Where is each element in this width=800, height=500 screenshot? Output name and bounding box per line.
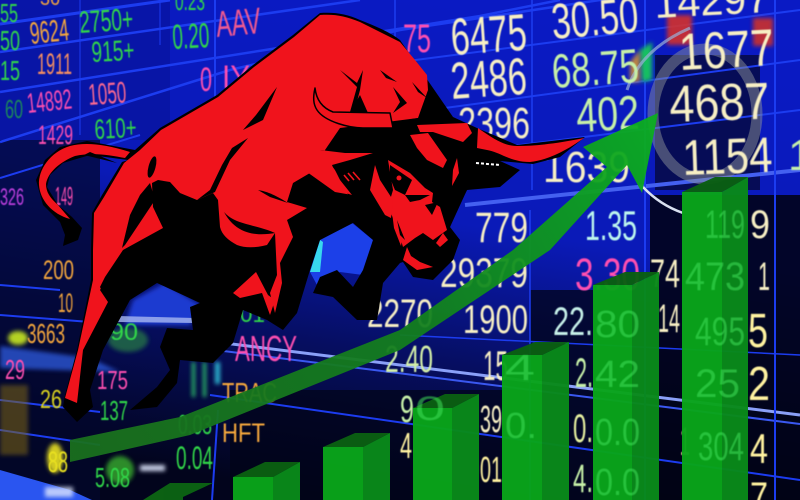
ticker digits: 2 (748, 358, 770, 411)
black neck behind head (325, 118, 478, 255)
faint digits on bars: 0 (415, 390, 445, 428)
ticker digits: 9624 (28, 12, 71, 51)
ticker digits: 1 (758, 255, 770, 299)
ticker digits: 2.40 (385, 339, 433, 381)
ticker digits: 2396 (458, 99, 530, 148)
ticker digits: HFT (222, 418, 265, 448)
faint digits on bars: 25 (695, 362, 740, 406)
faint digits on bars: 42 (595, 354, 640, 396)
faint digits on bars: 473 (685, 255, 745, 299)
ticker digits: 1050 (87, 76, 127, 112)
bar 3 (413, 394, 479, 500)
ticker digits: 1911 (37, 48, 72, 81)
ticker digits: 14892 (25, 83, 73, 119)
ticker digits: 2. (575, 349, 593, 396)
ticker digits: 1900 (463, 298, 528, 342)
tail (39, 144, 130, 219)
ticker digits: 4 (400, 425, 412, 466)
faint digits on bars: 0. (505, 405, 537, 446)
ticker digits: 68.75 (550, 40, 641, 99)
ticker digits: 39 (480, 399, 502, 441)
neck red stripe (312, 150, 373, 195)
hoof-side red shape (233, 272, 275, 315)
cheek (370, 165, 393, 218)
growth arrow (70, 113, 658, 462)
ticker digits: 1154 (681, 127, 773, 186)
ticker digits: 50 (0, 25, 20, 56)
bar 0 (143, 483, 213, 500)
faint digits on bars (415, 203, 745, 500)
bar 1 (233, 462, 300, 500)
ticker digits: 610+ (94, 112, 137, 145)
faint digits on bars: 495 (695, 310, 745, 354)
ticker digits: 5.08 (95, 462, 130, 493)
left horn (314, 88, 393, 128)
gap glow behind legs (125, 283, 200, 325)
ticker digits: ANCY (235, 328, 297, 369)
faint digits on bars: 4 (505, 347, 535, 388)
ticker digits: TRAC (222, 377, 277, 408)
ticker digits: 3663 (27, 318, 65, 349)
bar 6 (682, 177, 748, 500)
ticker digits: 137 (100, 395, 128, 426)
right horn (477, 128, 584, 162)
faint digits on bars: 119 (705, 203, 745, 247)
ticker digits: 402 (575, 87, 640, 143)
ticker digits: 1429 (38, 120, 73, 150)
ticker digits: 14 (658, 297, 680, 341)
jaw (392, 212, 402, 246)
ticker digits: 01 (480, 449, 502, 490)
ticker digits: 29 (5, 354, 25, 385)
head sliver (452, 158, 459, 186)
body shading (84, 70, 427, 302)
muzzle (403, 247, 433, 270)
bull face (388, 160, 447, 247)
ticker digits: 01 (240, 301, 265, 328)
ticker digits: 4. (573, 457, 593, 500)
horn-mouth drool highlight (476, 163, 500, 165)
ticker digits: 4 (750, 425, 768, 472)
ticker digits: 9 (400, 389, 414, 431)
ticker digits: 10 (58, 288, 73, 318)
eye and face lines (390, 165, 438, 252)
ticker digits: 9 (750, 203, 770, 247)
ticker digits: 200 (43, 255, 74, 285)
nostril (436, 233, 448, 247)
ticker digits: 1639 (543, 143, 630, 192)
ticker digits: 60 (5, 94, 23, 124)
ticker digits: 2486 (449, 48, 529, 111)
bull black silhouette (36, 13, 585, 422)
bar 2 (323, 433, 390, 500)
ticker digits: 3.30 (575, 249, 640, 300)
ticker digits: 88 (48, 446, 68, 479)
ticker digits: 15 (0, 55, 20, 86)
ticker digits: 0.20 (171, 16, 210, 57)
neon streaks (0, 328, 220, 484)
ticker digits: 2270 (367, 292, 433, 336)
wrinkle marks (344, 172, 360, 181)
ticker digits: 149 (55, 181, 73, 211)
ticker digits: 75 (403, 17, 431, 61)
brow band (417, 123, 472, 142)
faint digits on bars: 0.0 (595, 412, 640, 454)
bull body red (65, 15, 428, 403)
faint digits on bars: 304 (698, 425, 744, 469)
HUD rings (627, 15, 773, 213)
ticker digits: 0.03 (178, 409, 212, 440)
bar 4 (502, 342, 569, 500)
ticker digits: 90 (110, 319, 138, 346)
faint digits on bars: 80 (595, 304, 640, 346)
ticker digits: 779 (475, 204, 528, 252)
ticker digits: 74 (650, 252, 680, 296)
bar 5 (593, 272, 659, 500)
ticker digits: 15 (483, 342, 508, 389)
ticker digits: IY (222, 59, 250, 95)
ticker digits: 29379 (440, 249, 528, 296)
ticker digits: 22. (553, 300, 593, 344)
ticker digits: 326 (0, 184, 24, 211)
light bands (0, 346, 120, 372)
ticker digits: 26 (40, 384, 62, 414)
ticker digits: 5 (748, 305, 768, 358)
ticker digits: 1677 (678, 19, 775, 82)
forehead (410, 133, 447, 168)
ticker digits: 175 (97, 365, 128, 395)
ticker digits: 0.04 (176, 440, 213, 476)
bar chart (143, 177, 748, 500)
ticker digits: 2750+ (78, 1, 134, 40)
ticker digits: 1.35 (585, 202, 637, 249)
ticker digits: 915+ (91, 35, 135, 69)
ticker digits: 0. (573, 407, 593, 451)
ticker digits: 6475 (449, 4, 529, 67)
ticker digits: 0 (200, 61, 212, 99)
ticker digits: 4687 (668, 73, 770, 134)
cyan sliver (310, 240, 323, 272)
red bull (36, 13, 585, 422)
ticker digits: 1 (680, 420, 690, 464)
